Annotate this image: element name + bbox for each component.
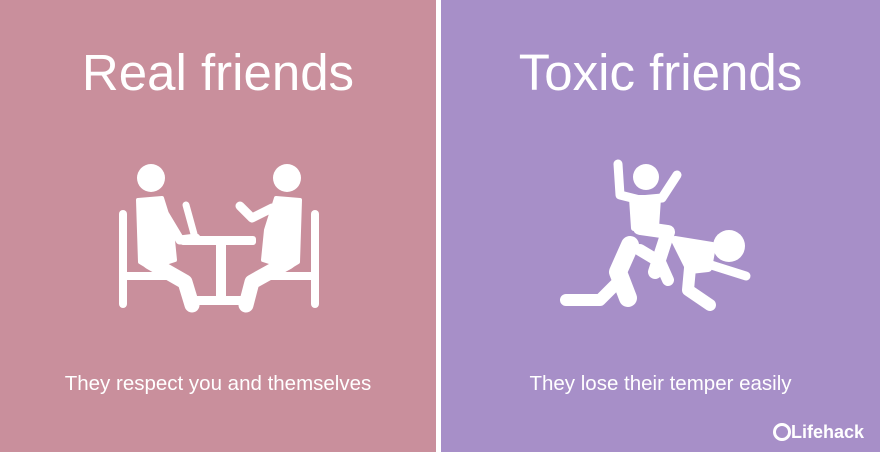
icon: two people at table <box>119 164 319 312</box>
subtitle: real friends: They respect you and themselves <box>65 372 371 395</box>
title: real friends: Real friends <box>82 44 354 101</box>
subtitle: toxic friends: They lose their temper easily <box>529 372 792 395</box>
icon: fighting people <box>560 160 750 311</box>
panel: real friends <box>0 0 436 452</box>
logo: Lifehack: Lifehack <box>791 422 864 442</box>
title: toxic friends: Toxic friends <box>519 44 802 101</box>
panel: toxic friends <box>441 0 880 452</box>
